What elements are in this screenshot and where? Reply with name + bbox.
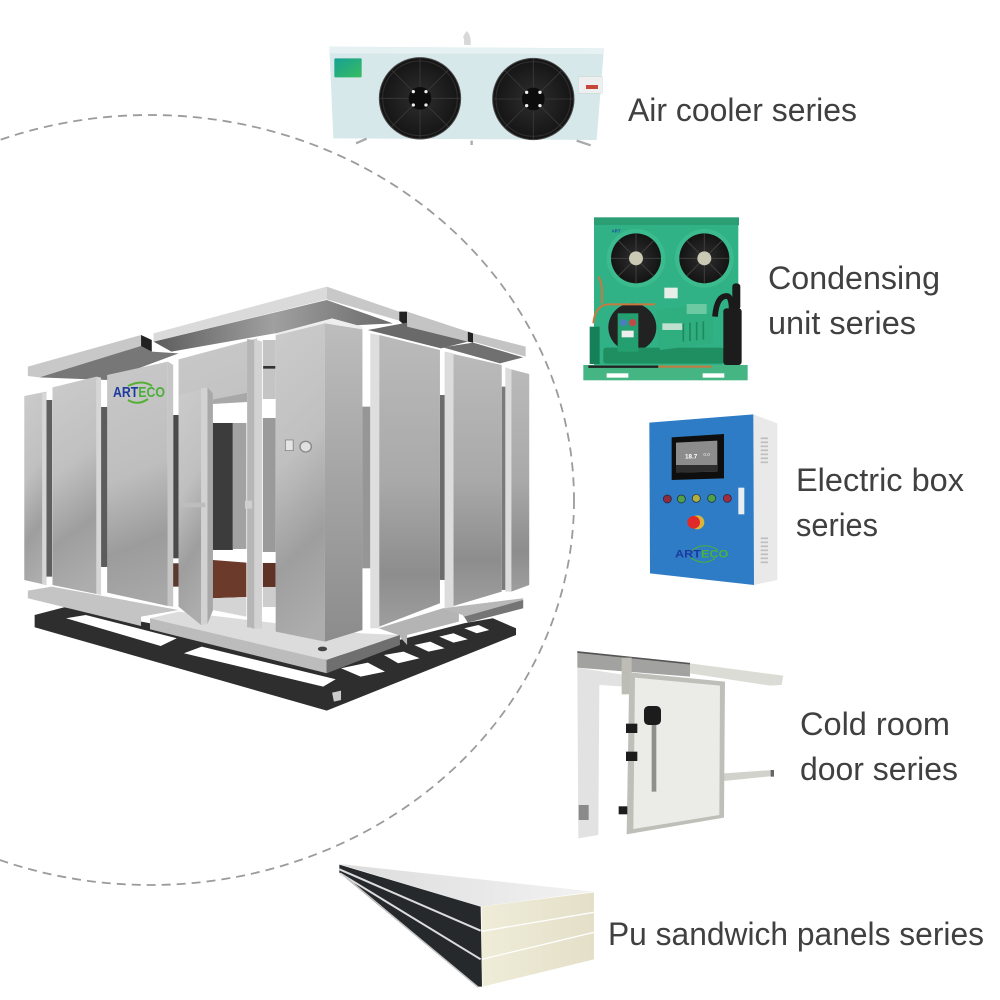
cold room door label: Cold room xyxy=(800,706,950,742)
air cooler product image xyxy=(329,34,604,145)
green label xyxy=(334,58,362,77)
cooler body xyxy=(329,47,604,140)
logo arcs xyxy=(690,546,718,562)
electric box label xyxy=(796,462,964,543)
lower track xyxy=(724,770,774,781)
condensing unit product image xyxy=(583,217,748,380)
indicator buttons xyxy=(663,494,731,503)
cold room illustration xyxy=(24,287,529,711)
logo: ARTECO on cold room: ARTECO xyxy=(113,384,165,401)
right wall panel two xyxy=(445,352,502,608)
panel dark sides xyxy=(339,865,482,987)
fan right xyxy=(675,229,734,288)
wall panel second left xyxy=(52,377,101,595)
right wall panel one xyxy=(370,333,440,628)
door opening interior xyxy=(213,393,247,617)
compressor xyxy=(657,304,713,350)
sliding rail xyxy=(577,652,690,677)
wall panel far left edge xyxy=(42,393,46,585)
unit top band xyxy=(594,217,739,225)
box logo: ARTECO xyxy=(675,548,728,560)
door handle xyxy=(644,706,661,792)
cold room door label xyxy=(800,706,958,787)
vents xyxy=(761,438,768,562)
condensing unit label: unit series xyxy=(768,305,916,341)
hanger xyxy=(622,658,632,694)
electric box label: series xyxy=(796,507,878,543)
left vertical vessel xyxy=(590,327,600,364)
rail cover xyxy=(690,663,783,686)
panel bottom edge xyxy=(343,875,478,987)
fan left xyxy=(379,58,461,139)
condenser coil disc xyxy=(608,303,656,351)
panel silver seams xyxy=(339,869,481,959)
door frame post xyxy=(577,668,625,838)
cold room door label: door series xyxy=(800,751,958,787)
electrical box xyxy=(664,288,678,298)
wall panel with logo xyxy=(107,362,173,607)
air cooler label: Air cooler series xyxy=(628,92,857,128)
corner panel block xyxy=(276,318,362,642)
electric box label: Electric box xyxy=(796,462,964,498)
sandwich panels label: Pu sandwich panels series xyxy=(608,916,984,952)
panel cream foam ends xyxy=(482,892,594,987)
brand mark: ART xyxy=(612,228,621,233)
touch screen: 0.0 xyxy=(703,452,710,457)
door leaf xyxy=(627,672,725,834)
base plate xyxy=(583,365,748,380)
receiver tank xyxy=(603,348,724,364)
panel top face xyxy=(339,864,593,907)
fan left xyxy=(607,229,665,288)
black suction pipe and accumulator xyxy=(715,283,742,365)
condensing unit label: Condensing xyxy=(768,260,940,296)
door hinges and handle base xyxy=(619,724,637,814)
pipe xyxy=(465,34,467,45)
right wall panel three xyxy=(505,367,529,592)
frame latch xyxy=(579,805,589,820)
copper piping xyxy=(593,277,712,367)
junction box xyxy=(578,77,602,93)
cold room door product image xyxy=(577,652,783,838)
rail top edge xyxy=(577,652,690,664)
roof panels xyxy=(28,287,526,380)
door frame panel xyxy=(179,338,262,628)
floor panels xyxy=(28,587,523,673)
gaps between wall panels xyxy=(46,340,506,607)
emergency stop xyxy=(687,515,704,529)
electric box product image xyxy=(649,414,777,585)
gauge panel xyxy=(618,313,638,352)
touch screen xyxy=(672,434,724,480)
unit backplate xyxy=(594,225,738,365)
cooler top band xyxy=(329,47,604,54)
mounting feet xyxy=(356,139,591,145)
fan right xyxy=(493,58,574,140)
wall panel far left xyxy=(24,392,46,585)
touch screen: 18.7 xyxy=(685,454,698,461)
switch xyxy=(738,488,744,514)
pu sandwich panels product image xyxy=(339,864,594,987)
open door leaf xyxy=(179,387,252,625)
bottom line fittings xyxy=(588,363,658,370)
dashed circle around cold room xyxy=(0,115,574,885)
condensing unit label xyxy=(768,260,940,341)
steel base frame xyxy=(35,607,516,711)
box side xyxy=(753,414,777,585)
box front xyxy=(649,414,754,585)
